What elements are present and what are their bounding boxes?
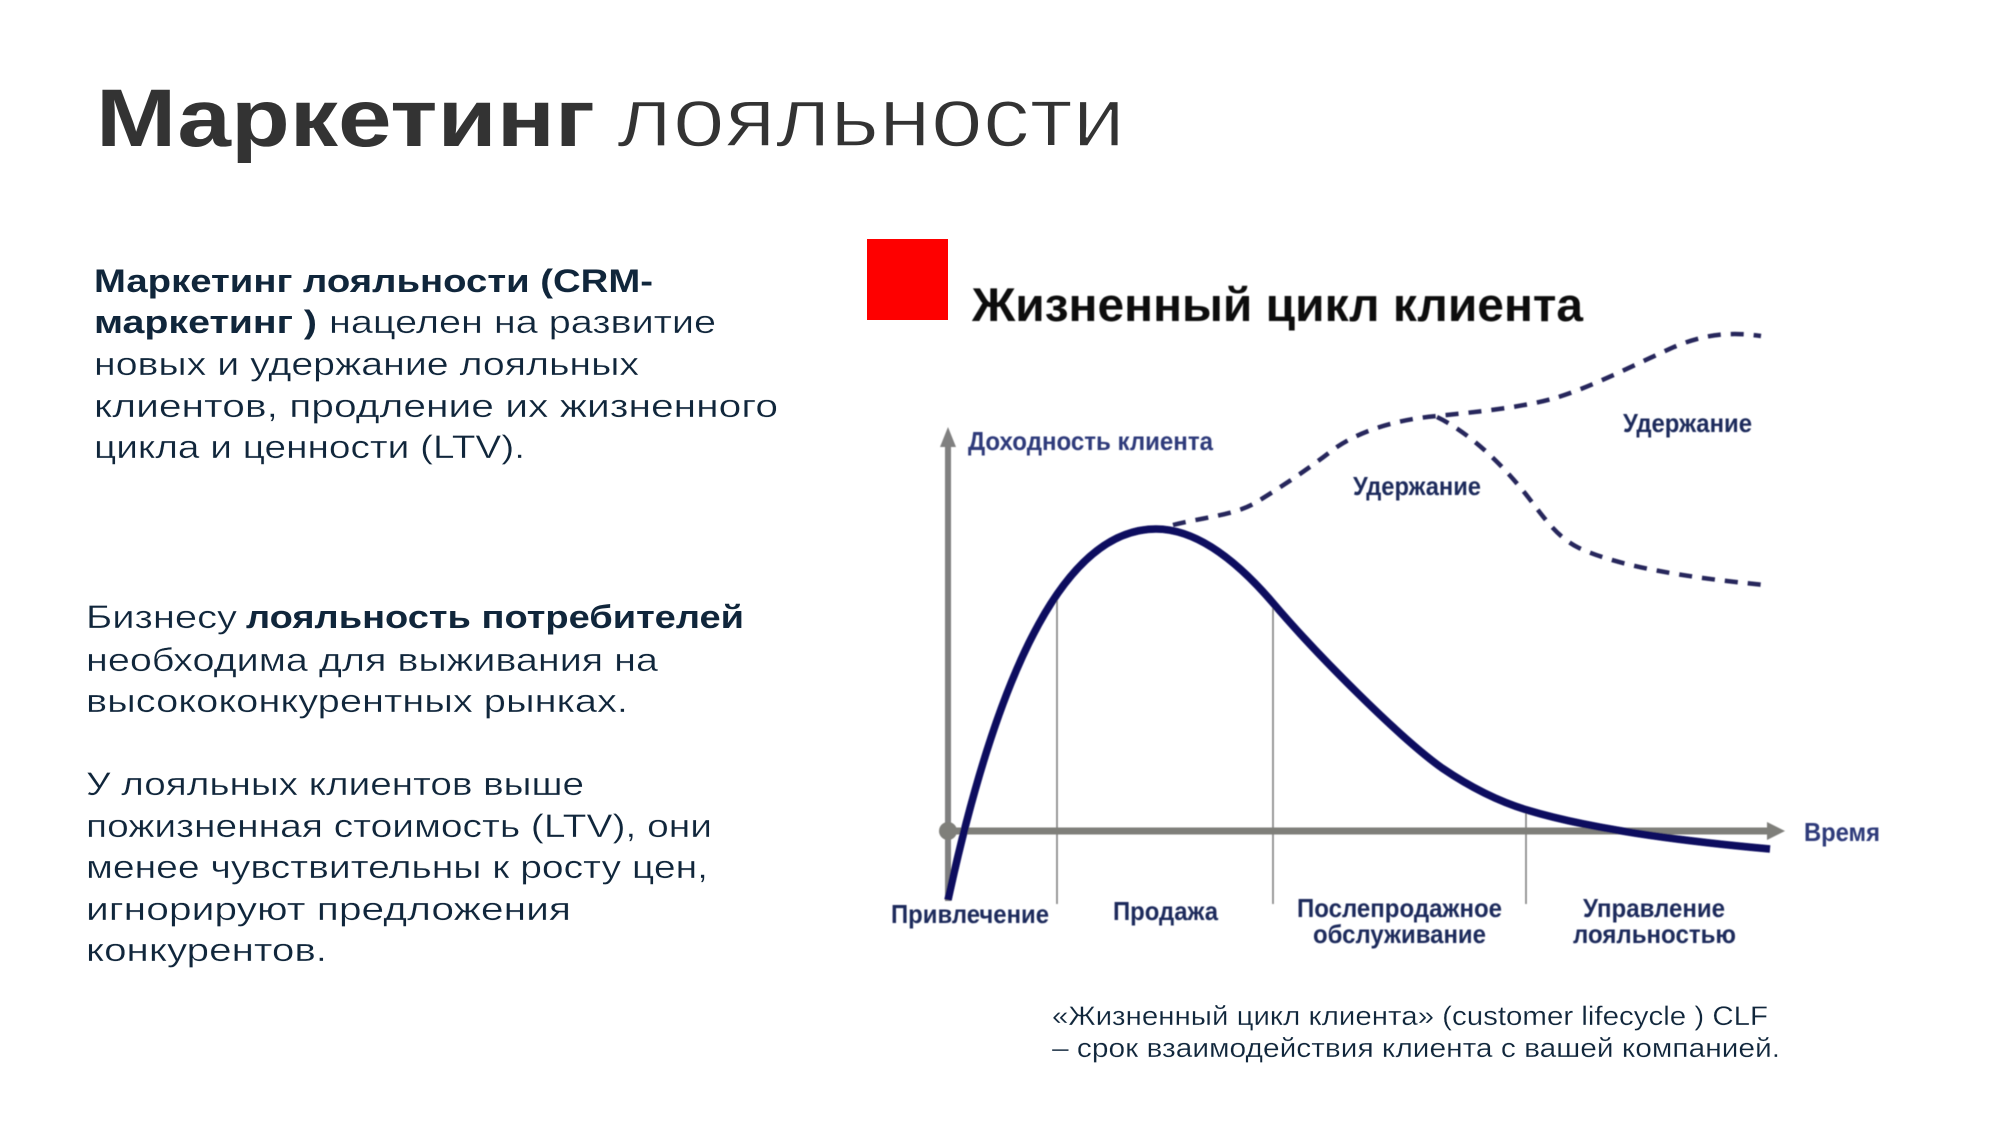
icon: red square <box>867 239 948 320</box>
text block: why business needs loyalty: высококонкурентных рынках. <box>86 683 628 719</box>
main revenue curve <box>948 529 1770 900</box>
caption: «Жизненный цикл клиента» (customer lifecycle ) CLF <box>1052 1001 1768 1031</box>
stage label: after-sales service: Послепродажное <box>1297 893 1502 923</box>
chart: customer lifecycle <box>891 278 1880 949</box>
text block: loyal customers LTV: игнорируют предложения <box>86 891 571 927</box>
axis label: time: Время <box>1804 817 1880 847</box>
text block: loyal customers LTV <box>86 766 712 968</box>
title: лояльности <box>617 70 1125 164</box>
stage label: loyalty management: лояльностью <box>1573 919 1736 949</box>
title: Маркетинг <box>96 73 595 164</box>
stage divider lines <box>1057 596 1526 904</box>
label: retention upper: Удержание <box>1623 408 1752 438</box>
caption <box>1052 1001 1780 1063</box>
stage label: after-sales service <box>1297 893 1502 949</box>
text block: definition of loyalty marketing: Маркетинг лояльности (CRM- <box>94 263 653 299</box>
text block: definition of loyalty marketing: нацелен на развитие <box>329 304 716 340</box>
text block: why business needs loyalty: лояльность потребителей <box>246 599 744 635</box>
axis label: revenue: Доходность клиента <box>968 426 1213 456</box>
text block: definition of loyalty marketing: цикла и ценности (LTV). <box>94 429 525 465</box>
text block: definition of loyalty marketing: новых и удержание лояльных <box>94 346 639 382</box>
dashed curve: upper retention <box>1173 334 1761 525</box>
stage label: after-sales service: обслуживание <box>1313 919 1486 949</box>
stage label: loyalty management <box>1573 893 1736 949</box>
label: retention lower: Удержание <box>1353 471 1481 501</box>
text block: definition of loyalty marketing: маркетинг ) <box>94 304 317 340</box>
text block: definition of loyalty marketing <box>94 263 778 465</box>
text block: loyal customers LTV: пожизненная стоимость (LTV), они <box>86 808 712 844</box>
vertical axis arrow <box>940 427 956 901</box>
caption: – срок взаимодействия клиента с вашей компанией. <box>1052 1033 1780 1063</box>
dashed curve: lower retention <box>1437 417 1765 585</box>
stage label: sale: Продажа <box>1113 896 1218 926</box>
text block: loyal customers LTV: менее чувствительны к росту цен, <box>86 849 708 885</box>
horizontal axis arrow <box>939 822 1785 840</box>
text block: why business needs loyalty: Бизнесу <box>86 599 237 635</box>
title <box>96 70 1125 164</box>
text block: loyal customers LTV: У лояльных клиентов выше <box>86 766 584 802</box>
text block: definition of loyalty marketing: клиентов, продление их жизненного <box>94 388 778 424</box>
chart heading: Жизненный цикл клиента <box>971 278 1584 331</box>
text block: why business needs loyalty <box>86 599 744 719</box>
stage label: acquisition: Привлечение <box>891 899 1049 929</box>
stage label: loyalty management: Управление <box>1583 893 1725 923</box>
text block: loyal customers LTV: конкурентов. <box>86 932 327 968</box>
text block: why business needs loyalty: необходима для выживания на <box>86 642 658 678</box>
